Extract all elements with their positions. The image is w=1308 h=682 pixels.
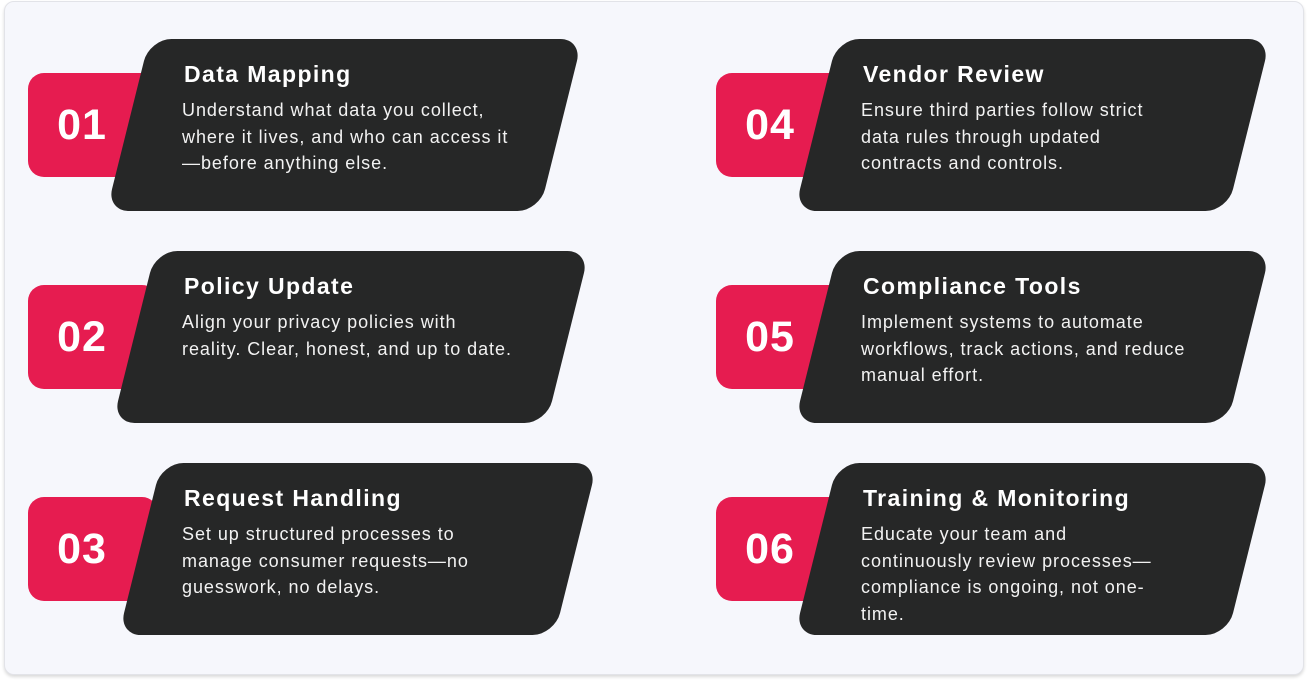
body 01: —before anything else. [182, 153, 388, 173]
title 03: Request Handling [184, 485, 402, 511]
body 01: Understand what data you collect, [182, 100, 485, 120]
body 01: where it lives, and who can access it [182, 126, 508, 146]
body 04 [861, 100, 1143, 173]
body 05 [861, 312, 1185, 385]
title 01: Data Mapping [184, 61, 352, 87]
body 04: contracts and controls. [861, 153, 1064, 173]
card 05: 05 [745, 313, 795, 361]
body 06: continuously review processes— [861, 550, 1152, 570]
title 05: Compliance Tools [863, 273, 1082, 299]
body 04: data rules through updated [861, 126, 1101, 146]
body 04: Ensure third parties follow strict [861, 100, 1143, 120]
title 06: Training & Monitoring [863, 485, 1130, 511]
body 02 [182, 312, 512, 359]
title 02: Policy Update [184, 273, 354, 299]
body 05: manual effort. [861, 365, 984, 385]
title 04: Vendor Review [863, 61, 1045, 87]
card 03 [28, 463, 593, 635]
card 04 [716, 39, 1266, 211]
card 06 [716, 463, 1266, 635]
body 01 [182, 100, 508, 173]
card 01 [28, 39, 578, 211]
card 05 [716, 251, 1266, 423]
body 03: manage consumer requests—no [182, 550, 469, 570]
card 02: 02 [57, 313, 107, 361]
body 03 [182, 524, 469, 597]
card 01: 01 [57, 101, 107, 149]
card 04: 04 [745, 101, 795, 149]
body 06: Educate your team and [861, 524, 1067, 544]
body 06 [861, 524, 1152, 624]
card 06: 06 [745, 525, 795, 573]
body 05: Implement systems to automate [861, 312, 1144, 332]
body 06: time. [861, 604, 905, 624]
body 02: reality. Clear, honest, and up to date. [182, 338, 512, 358]
body 03: Set up structured processes to [182, 524, 455, 544]
body 03: guesswork, no delays. [182, 577, 380, 597]
body 06: compliance is ongoing, not one- [861, 577, 1145, 597]
body 02: Align your privacy policies with [182, 312, 456, 332]
body 05: workflows, track actions, and reduce [861, 338, 1185, 358]
card 03: 03 [57, 525, 107, 573]
card 02 [28, 251, 585, 423]
